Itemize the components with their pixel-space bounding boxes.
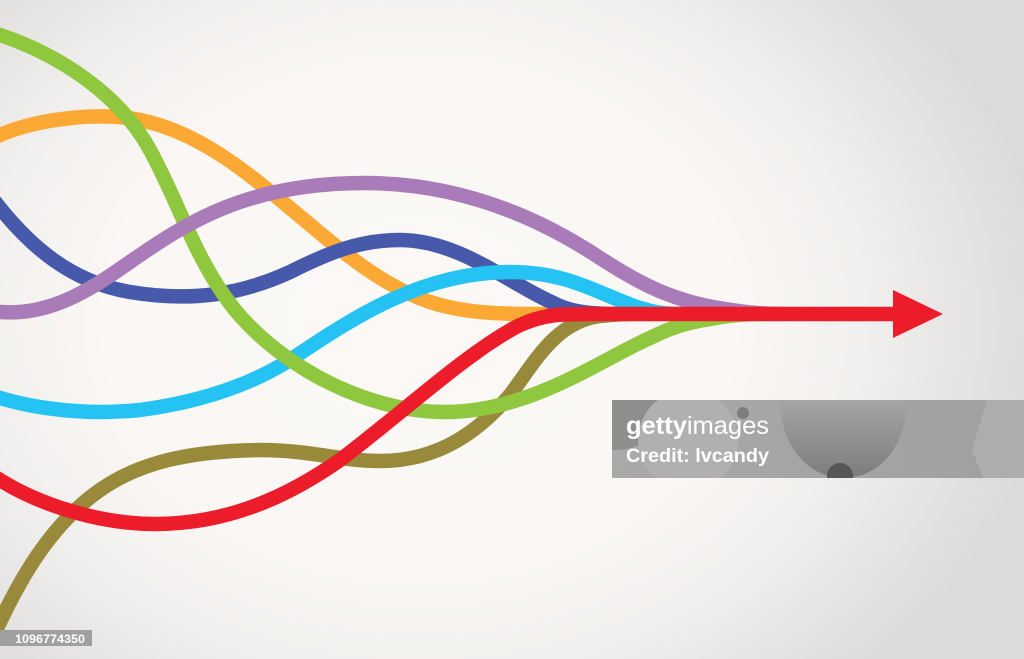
arrow: red line with arrowhead xyxy=(0,290,943,524)
text: gettyimages logo: gettyimages xyxy=(626,412,769,440)
line: orange xyxy=(0,116,560,314)
image id label xyxy=(0,630,92,646)
line: purple xyxy=(0,183,780,314)
watermark: getty images credit banner xyxy=(612,400,1024,478)
line: cyan xyxy=(0,272,680,412)
line: green xyxy=(0,31,760,412)
image id label: 1096774350 xyxy=(15,632,85,646)
text: credit: Credit: lvcandy xyxy=(626,446,769,467)
line: olive xyxy=(0,314,630,636)
line: dark blue xyxy=(0,198,620,314)
